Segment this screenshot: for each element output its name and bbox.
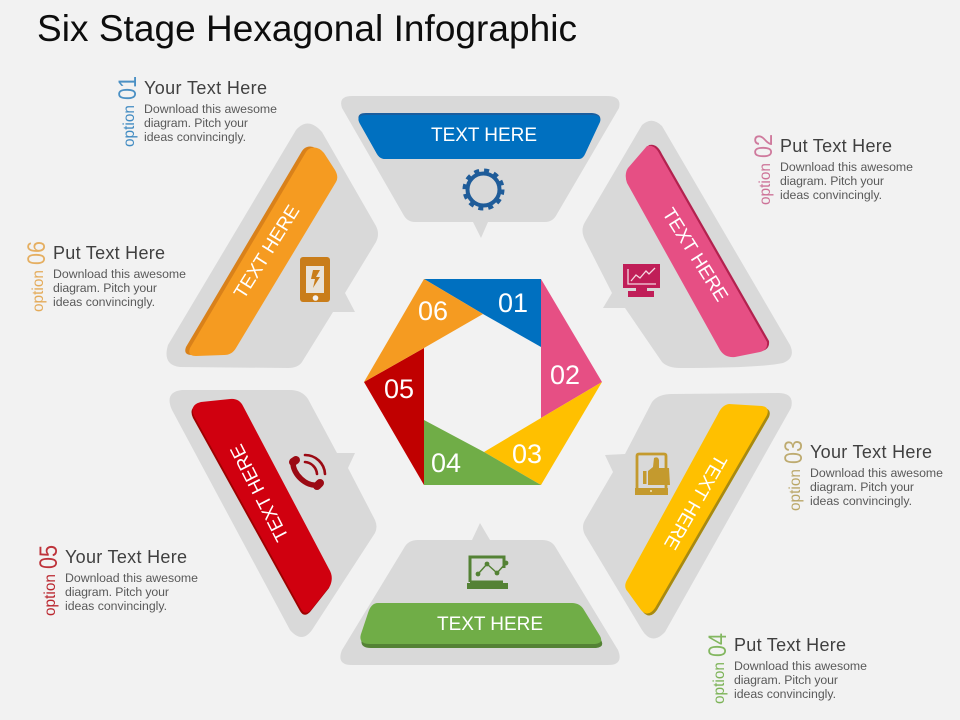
text block: option 04: Put Text Here — [734, 635, 846, 655]
segment 02 — [541, 279, 602, 418]
segment 04: 04 — [431, 448, 461, 478]
text block: option 05 — [35, 545, 198, 616]
text block: option 04: ideas convincingly. — [734, 687, 836, 701]
card background with pointer — [340, 523, 620, 665]
text block: option 02: diagram. Pitch your — [780, 174, 884, 188]
panel: stage 01 card — [341, 96, 620, 238]
text block: option 05: Download this awesome — [65, 571, 198, 585]
ribbon: orange: TEXT HERE — [230, 202, 304, 303]
ribbon: red — [192, 399, 332, 615]
text block: option 04: option — [711, 662, 728, 704]
text block: option 01: Download this awesome — [144, 102, 277, 116]
segment 05: 05 — [384, 374, 414, 404]
segment 05 — [364, 348, 424, 485]
card background with pointer — [583, 393, 792, 639]
ribbon: green: TEXT HERE — [437, 614, 543, 635]
text block: option 03: 03 — [780, 440, 808, 464]
text block: option 06: Put Text Here — [53, 243, 165, 263]
text block: option 03: option — [787, 469, 804, 511]
card background with pointer — [170, 390, 376, 637]
text block: option 05: Your Text Here — [65, 547, 187, 567]
text block: option 05: option — [42, 574, 59, 616]
ribbon: green — [360, 603, 602, 648]
ribbon: pink — [626, 145, 769, 357]
panel: stage 04 card — [340, 523, 620, 665]
segment 01 — [424, 279, 541, 347]
text block: option 02: Put Text Here — [780, 136, 892, 156]
text block: option 06: option — [30, 270, 47, 312]
text block: option 06: diagram. Pitch your — [53, 281, 157, 295]
text block: option 02: Download this awesome — [780, 160, 913, 174]
text block: option 04: diagram. Pitch your — [734, 673, 838, 687]
text block: option 06: 06 — [23, 241, 51, 265]
icon: phone with signal — [293, 455, 325, 486]
text block: option 03: diagram. Pitch your — [810, 480, 914, 494]
icon: chart monitor — [623, 264, 660, 297]
text block: option 03: Your Text Here — [810, 442, 932, 462]
text block: option 03: ideas convincingly. — [810, 494, 912, 508]
segment 04 — [424, 420, 541, 485]
panel: stage 05 card — [170, 390, 376, 637]
text block: option 04: 04 — [704, 633, 732, 657]
text block: option 01: 01 — [114, 76, 142, 100]
segment 03: 03 — [512, 439, 542, 469]
ribbon: blue — [358, 113, 600, 159]
segment 03 — [484, 382, 602, 485]
text block: option 01 — [114, 76, 277, 147]
ribbon: pink: TEXT HERE — [658, 205, 732, 306]
text block: option 05: diagram. Pitch your — [65, 585, 169, 599]
panel: stage 06 card — [166, 123, 378, 368]
text block: option 05: ideas convincingly. — [65, 599, 167, 613]
central hexagon — [364, 279, 602, 485]
text block: option 01: Your Text Here — [144, 78, 267, 98]
icon: gear — [464, 170, 502, 208]
segment 01: 01 — [498, 288, 528, 318]
ribbon: yellow — [625, 404, 770, 616]
title: Six Stage Hexagonal Infographic — [37, 8, 577, 49]
text block: option 05: 05 — [35, 545, 63, 569]
card background with pointer — [341, 96, 620, 238]
ribbon: blue: TEXT HERE — [431, 125, 537, 146]
ribbon: red: TEXT HERE — [227, 441, 294, 544]
text block: option 06 — [23, 241, 186, 312]
text block: option 02: ideas convincingly. — [780, 188, 882, 202]
text block: option 06: ideas convincingly. — [53, 295, 155, 309]
icon: tablet thumbs up — [635, 454, 670, 495]
text block: option 02: option — [757, 163, 774, 205]
segment 06: 06 — [418, 296, 448, 326]
segment 06 — [364, 279, 483, 382]
text block: option 02 — [750, 134, 913, 205]
icon: mobile phone with bolt — [300, 257, 330, 302]
text block: option 04 — [704, 633, 867, 704]
card background with pointer — [582, 121, 792, 368]
icon: laptop with line chart — [467, 557, 508, 589]
text block: option 01: diagram. Pitch your — [144, 116, 248, 130]
panel: stage 02 card — [582, 121, 792, 368]
text block: option 02: 02 — [750, 134, 778, 158]
card background with pointer — [166, 123, 378, 368]
text block: option 06: Download this awesome — [53, 267, 186, 281]
panel: stage 03 card — [583, 393, 792, 639]
ribbon: yellow: TEXT HERE — [659, 451, 730, 553]
ribbon: orange — [185, 147, 337, 356]
text block: option 01: option — [121, 105, 138, 147]
text block: option 04: Download this awesome — [734, 659, 867, 673]
text block: option 03: Download this awesome — [810, 466, 943, 480]
text block: option 03 — [780, 440, 943, 511]
text block: option 01: ideas convincingly. — [144, 130, 246, 144]
segment 02: 02 — [550, 360, 580, 390]
